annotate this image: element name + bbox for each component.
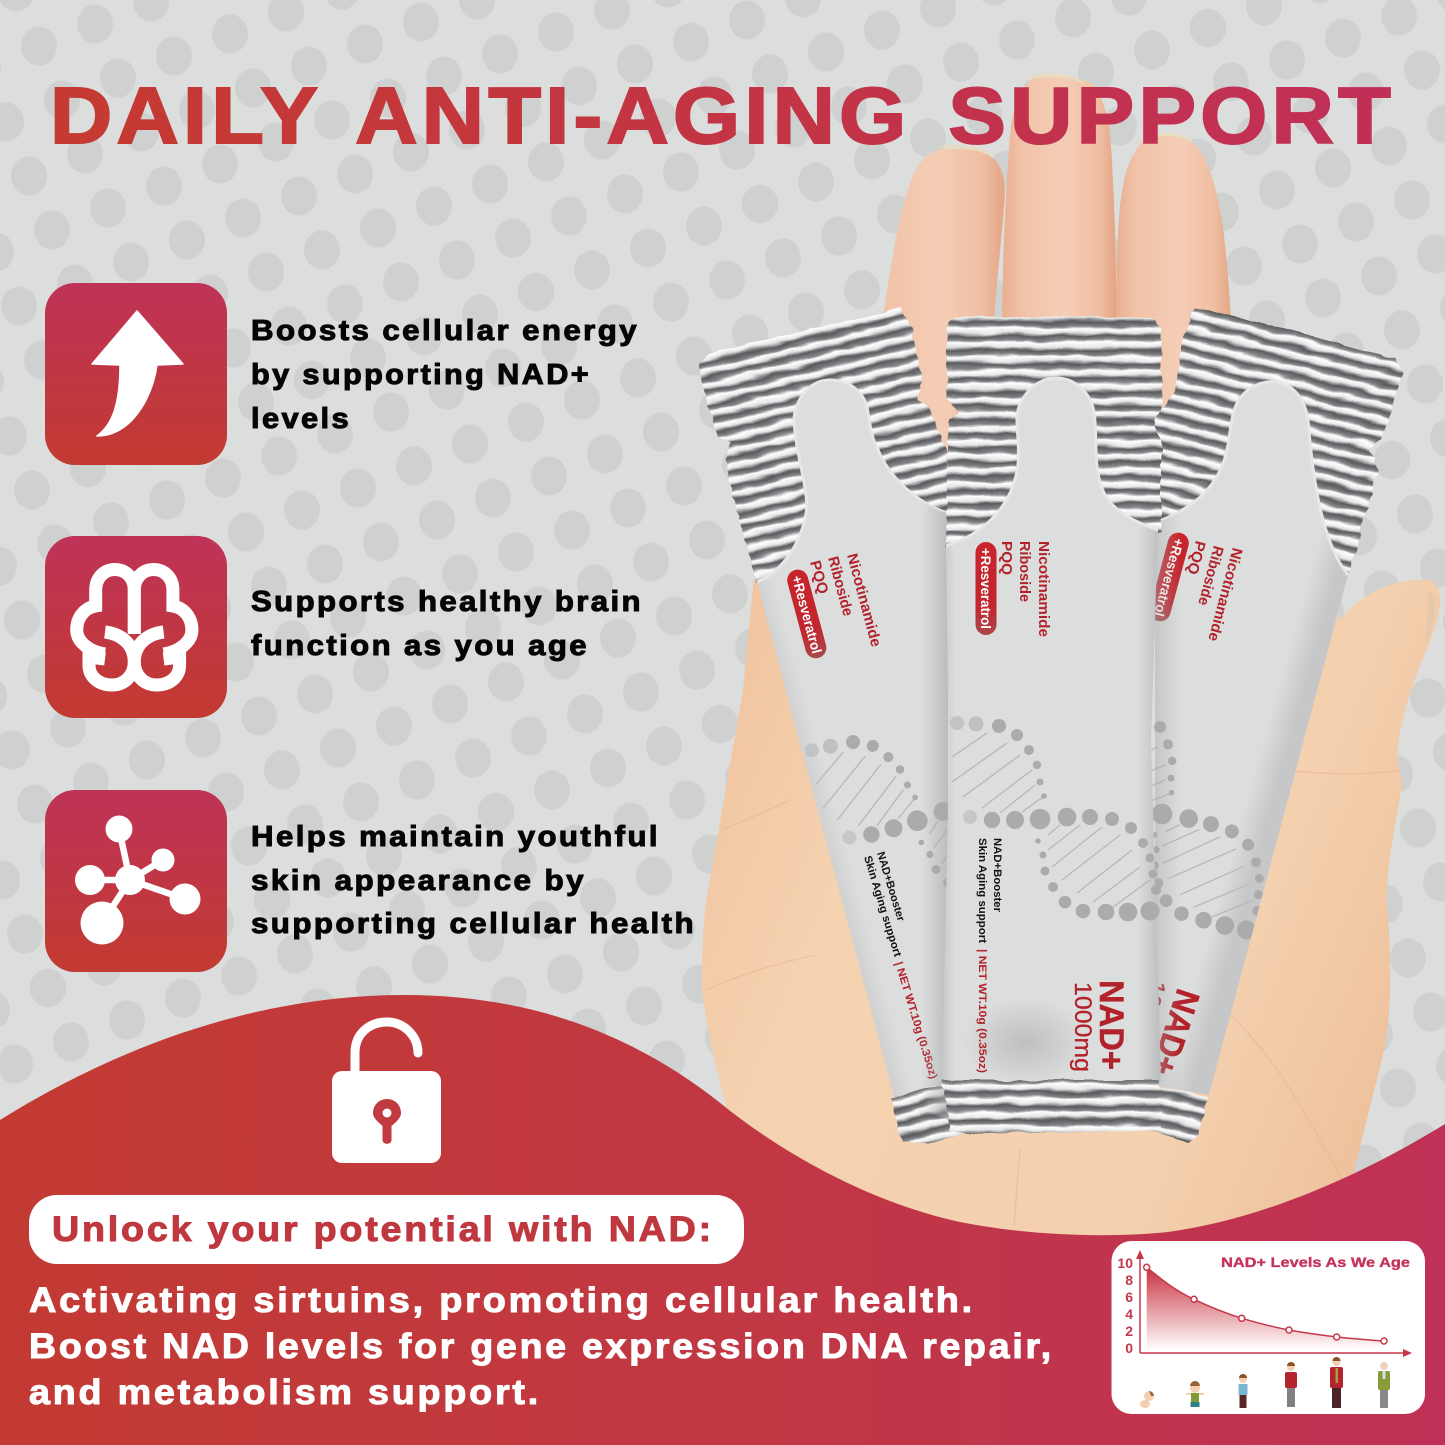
red wave panel [0,995,1445,1445]
benefit 3 [45,790,696,972]
middle sachet dosage [1069,980,1130,1072]
hand holding sachets [702,73,1440,1250]
text: brain function [251,586,643,662]
text: cellular energy: Boosts cellular energy [251,315,639,347]
chart title: NAD+ Levels As We Age [1221,1254,1410,1270]
right sachet dosage: 1000mg [1117,976,1171,1070]
left sachet product text [861,850,939,1081]
axes [1140,1256,1406,1353]
figure: baby [1140,1391,1154,1408]
palm and thumb [702,320,1440,1250]
benefit 1 [45,283,639,465]
figure: toddler [1186,1381,1204,1407]
body text: Boost NAD levels for gene expression DNA repair, [29,1327,1054,1366]
text: skin appearance: supporting cellular health [251,908,696,940]
middle sachet product text: Skin Aging support [976,838,988,943]
sachet: right [1150,308,1404,1143]
right sachet DNA helix [1151,721,1264,940]
sachet: left [698,307,962,1144]
text: cellular energy: by supporting NAD+ [251,359,591,391]
y axis labels: 8 [1125,1272,1133,1288]
middle sachet dosage: NAD+ [1092,980,1130,1070]
left sachet ingredients: Riboside [824,555,856,618]
y axis labels: 4 [1125,1306,1133,1322]
y axis labels: 2 [1125,1323,1133,1339]
figure: elderly man [1378,1362,1390,1408]
figure: boy [1238,1374,1248,1408]
y axis labels [1117,1255,1133,1356]
middle sachet ingredients: Nicotinamide [1035,541,1052,637]
y axis labels: 6 [1125,1289,1133,1305]
right sachet ingredients: Riboside [1194,544,1227,607]
icon: molecule [45,790,227,972]
text: brain function: function as you age [251,630,589,662]
middle sachet ingredients: +Resveratrol [978,548,994,629]
benefit 2 [45,536,643,718]
middle fingernail [1025,73,1086,85]
middle sachet product text [976,838,1003,1073]
left sachet product text: Skin Aging support [861,854,903,959]
right sachet bottom foil [1150,1085,1208,1143]
heading pill [29,1195,744,1264]
left sachet ingredients: +Resveratrol [789,574,825,655]
text: cellular energy [251,315,639,435]
text: skin appearance: Helps maintain youthful [251,821,660,853]
y axis labels: 10 [1117,1255,1133,1271]
body text [29,1281,1054,1412]
text: skin appearance [251,821,696,940]
text: skin appearance: skin appearance by [251,865,586,897]
heading pill: Unlock your potential with NAD: [52,1210,714,1249]
text: cellular energy: levels [251,403,351,435]
middle sachet ingredients: PQQ [998,541,1015,575]
body text: Activating sirtuins, promoting cellular health. [29,1281,975,1320]
middle sachet bottom foil [942,1080,1161,1134]
left sachet body [757,380,962,1125]
curve line and points [1144,1264,1387,1344]
right sachet ingredients: Nicotinamide [1204,546,1246,643]
figure: teen [1285,1362,1297,1407]
right sachet top foil [1150,308,1403,578]
left sachet ingredients [785,552,884,661]
left sachet top foil [700,308,947,582]
ring fingernail [1133,133,1194,147]
y axis labels: 0 [1125,1340,1133,1356]
figure: man [1330,1357,1343,1408]
ring finger [1116,135,1232,470]
left sachet bottom foil [890,1085,962,1145]
middle finger [1002,75,1116,345]
middle sachet body [942,378,1161,1082]
icon: brain [45,536,227,718]
body text: and metabolism support. [29,1373,541,1412]
right sachet body [1150,382,1348,1095]
text: brain function: Supports healthy brain [251,586,643,618]
index fingernail [934,145,994,156]
title: DAILY ANTI-AGING SUPPORT [50,71,1395,160]
icon: open padlock [332,1022,441,1163]
middle sachet product text: NAD+Booster [991,838,1003,913]
index finger [860,149,1005,470]
middle sachet top foil [946,317,1161,560]
middle sachet DNA helix [950,716,1161,921]
right sachet ingredients: PQQ [1183,539,1209,577]
right sachet dosage: NAD+ [1143,985,1207,1080]
chart card: NAD+ levels as we age [1112,1241,1425,1414]
left sachet product text: NAD+Booster [874,850,907,923]
icon: upward arrow [45,283,227,465]
middle sachet ingredients [976,541,1052,637]
right sachet ingredients: +Resveratrol [1151,537,1187,618]
left sachet ingredients: Nicotinamide [843,552,884,649]
middle sachet dosage: 1000mg [1069,982,1096,1072]
middle sachet ingredients: Riboside [1016,541,1033,602]
right sachet ingredients [1147,530,1246,643]
middle sachet product text: | NET WT.10g (0.35oz) [976,949,988,1073]
left sachet DNA helix [804,735,948,887]
curve area [1147,1267,1384,1351]
left sachet ingredients: PQQ [806,559,831,596]
sachet: middle [922,317,1181,1134]
right sachet dosage [1117,976,1207,1080]
left sachet product text: | NET WT.10g (0.35oz) [892,960,939,1081]
